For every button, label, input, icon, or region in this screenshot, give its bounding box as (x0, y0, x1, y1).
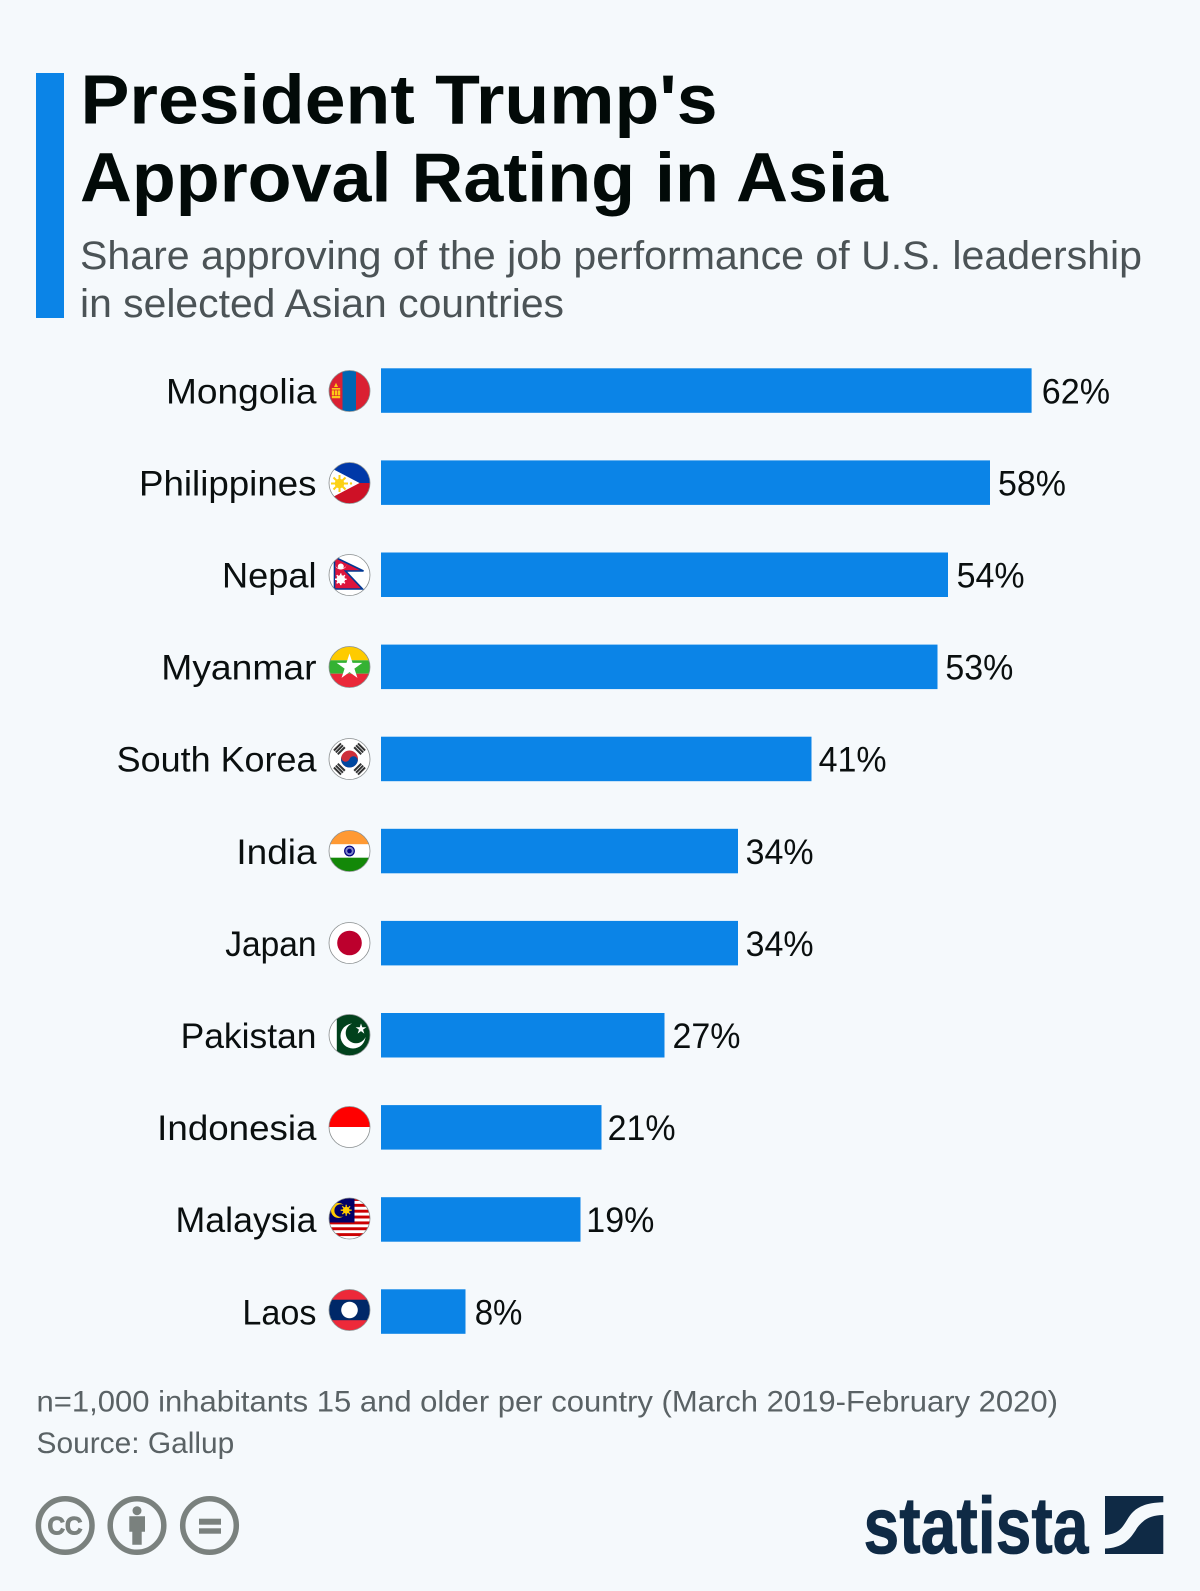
row: South Korea (117, 737, 887, 781)
row: Nepal (222, 552, 1025, 597)
icon: Pakistan flag (328, 1014, 371, 1056)
row: Japan: Japan (225, 925, 316, 964)
icon: South Korea flag (328, 738, 370, 780)
row: Malaysia (176, 1197, 654, 1242)
accent bar (36, 73, 64, 318)
subtitle: Share approving of the job performance of U.S. leadership (80, 234, 1142, 278)
row: Pakistan: 27% (672, 1017, 740, 1056)
footnote and source: Source: Gallup (36, 1427, 234, 1460)
row: South Korea: South Korea (117, 741, 317, 780)
row: Pakistan (181, 1013, 741, 1058)
row: Indonesia (157, 1105, 676, 1150)
icon: Laos flag (328, 1289, 370, 1331)
footnote and source: n=1,000 inhabitants 15 and older per country (March 2019-February 2020) (36, 1386, 1058, 1419)
row: Philippines: Philippines (139, 464, 316, 503)
icon: India flag (328, 830, 370, 872)
title (80, 60, 889, 216)
row: Myanmar (161, 645, 1013, 689)
row: India (236, 829, 814, 873)
icon: creative commons: CC (48, 1512, 82, 1540)
title: Approval Rating in Asia (80, 138, 889, 216)
row: Nepal: 54% (957, 556, 1025, 596)
logo: statista mark (1105, 1496, 1163, 1554)
row: Laos (242, 1289, 522, 1334)
row: Laos: Laos (242, 1293, 316, 1332)
subtitle (80, 234, 1142, 326)
footnote and source (36, 1386, 1058, 1460)
row: Philippines: 58% (998, 464, 1066, 503)
icon: Malaysia flag (328, 1198, 370, 1240)
row: Malaysia: Malaysia (176, 1201, 317, 1240)
row: Mongolia: 62% (1042, 372, 1110, 411)
row: India: India (236, 833, 317, 872)
row: Myanmar: 53% (945, 649, 1013, 688)
icon: Myanmar flag (328, 646, 370, 688)
row: Japan: 34% (746, 925, 814, 964)
row: India: 34% (746, 833, 814, 872)
icon: no derivatives (183, 1499, 236, 1552)
row: South Korea: 41% (819, 741, 887, 780)
icon: creative commons (38, 1499, 92, 1552)
title: President Trump's (80, 60, 718, 138)
row: Japan (225, 921, 814, 965)
icon: Indonesia flag (328, 1106, 370, 1148)
row: Mongolia (166, 368, 1110, 413)
bar chart (117, 368, 1110, 1334)
icon: Mongolia flag (328, 370, 370, 412)
icon: attribution (110, 1499, 164, 1552)
row: Indonesia: 21% (608, 1109, 676, 1148)
row: Indonesia: Indonesia (157, 1109, 317, 1148)
row: Pakistan: Pakistan (181, 1017, 316, 1056)
row: Mongolia: Mongolia (166, 372, 317, 411)
icon: Philippines flag (328, 462, 370, 504)
row: Philippines (139, 460, 1066, 505)
row: Myanmar: Myanmar (161, 649, 317, 688)
subtitle: in selected Asian countries (80, 282, 564, 326)
row: Laos: 8% (475, 1293, 522, 1332)
icon: Nepal flag (328, 554, 370, 596)
row: Malaysia: 19% (586, 1201, 654, 1240)
logo: statista wordmark: statista (864, 1481, 1089, 1570)
row: Nepal: Nepal (222, 556, 316, 596)
icon: Japan flag (328, 922, 370, 964)
